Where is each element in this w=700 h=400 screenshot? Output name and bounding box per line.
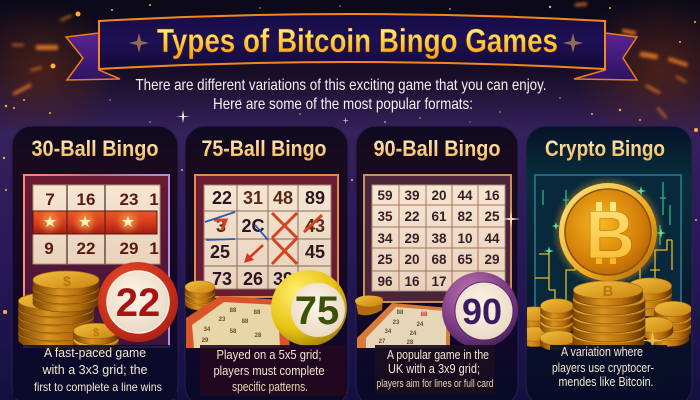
bingo ball: 22 [98, 262, 178, 342]
bingo card: 3x3 grid: 23 [120, 190, 138, 209]
flat bingo card: 27 [379, 339, 386, 345]
flat bingo card: 29 [202, 338, 209, 344]
bingo card: 3x3 grid: 22 [77, 239, 95, 258]
flat bingo card: 28 [407, 340, 414, 346]
flat bingo card [357, 303, 450, 348]
description: players use cryptocer- [552, 360, 654, 375]
description: UK with a 3x9 grid; [388, 361, 480, 376]
flat bingo card: 88 [421, 312, 428, 318]
heading: 75-Ball Bingo: 75-Ball Bingo [202, 136, 326, 161]
intro text [136, 77, 546, 113]
bingo card: number grid: 17 [431, 274, 447, 289]
heading: 30-Ball Bingo: 30-Ball Bingo [32, 136, 158, 161]
caption backdrop [375, 345, 495, 395]
bingo card: 3x3 grid [33, 185, 160, 264]
side coin stacks [516, 278, 692, 351]
heading: Crypto Bingo: Crypto Bingo [545, 136, 665, 161]
bingo card: number grid: 82 [457, 209, 473, 224]
bingo card: 3x3 grid: 7 [45, 190, 55, 209]
bingo card: number grid: 10 [457, 231, 473, 246]
bingo ball: 90: 90 [462, 291, 502, 332]
bingo card: number grid: 22 [404, 209, 420, 224]
bingo ball: 90 [442, 272, 518, 348]
bingo card: number grid: 68 [431, 252, 447, 267]
description [34, 345, 162, 394]
bingo ball: 75: 75 [295, 289, 339, 333]
sparkle [502, 210, 520, 228]
card frame [195, 175, 338, 297]
flat bingo card: 23 [219, 317, 226, 323]
bingo card: 5x5 grid: 3 [216, 216, 226, 236]
bingo card: 3x3 grid: 9 [44, 239, 54, 258]
intro text: Here are some of the most popular formats: [213, 96, 473, 113]
panel: 75-Ball Bingo [185, 126, 348, 400]
caption backdrop [13, 345, 177, 399]
description: with a 3x3 grid; the [42, 362, 148, 377]
bingo card: 5x5 grid: 2C [241, 216, 265, 236]
bingo card: 5x5 grid: 43 [305, 216, 325, 236]
bingo card: 5x5 grid: 31 [243, 188, 263, 208]
description [214, 347, 324, 394]
bingo card: 5x5 grid: 45 [305, 242, 325, 262]
bingo card: 3x3 grid: 1 [149, 239, 159, 258]
bingo card: 5x5 grid [204, 185, 331, 289]
flat bingo card: 24 [417, 322, 424, 328]
description [552, 344, 654, 389]
bingo card: number grid: 25 [484, 209, 500, 224]
panel: Crypto Bingo [516, 126, 692, 400]
flat bingo card: 88 [230, 308, 237, 314]
bingo card: number grid: 29 [484, 252, 500, 267]
panel: 30-Ball Bingo [12, 126, 178, 400]
flat bingo card: 23 [393, 320, 400, 326]
bingo card: number grid: 96 [377, 274, 393, 289]
bingo card: number grid: 44 [457, 188, 473, 203]
banner star: right [563, 33, 583, 53]
description [376, 347, 494, 390]
central coin stack: B [603, 283, 614, 300]
bingo card: number grid: 20 [404, 252, 420, 267]
bingo card: number grid: 34 [377, 231, 393, 246]
flat bingo card: 88 [397, 310, 404, 316]
bingo card: 3x3 grid: 16 [77, 190, 95, 209]
description: players must complete [214, 363, 324, 378]
bingo card: number grid: 39 [404, 188, 420, 203]
bingo card: 5x5 grid: 89 [305, 188, 325, 208]
flat bingo card [186, 296, 290, 348]
bingo card: 5x5 grid: 48 [273, 188, 293, 208]
bingo card: number grid [372, 185, 505, 291]
bingo card: number grid: 29 [404, 231, 420, 246]
panel: 90-Ball Bingo [355, 126, 520, 400]
big bitcoin coin [556, 180, 660, 284]
description: A fast-paced game [44, 345, 146, 360]
card frame [364, 175, 511, 302]
bingo card: number grid: 25 [377, 252, 393, 267]
banner star: left [129, 33, 149, 53]
bingo card: 5x5 grid: 73 [212, 269, 232, 289]
bingo card: 3x3 grid: 29 [120, 239, 138, 258]
description: first to complete a line wins [34, 380, 162, 394]
ribbon tail: left [66, 33, 120, 80]
coin stacks [18, 271, 118, 354]
bingo card: number grid: 61 [431, 209, 447, 224]
small coin stack [185, 281, 215, 310]
bingo card: 5x5 grid: 22 [212, 188, 232, 208]
description: A variation where [561, 344, 643, 359]
bingo card frame [24, 175, 169, 347]
description: specific patterns. [232, 379, 308, 394]
bingo ball: 22: 22 [116, 281, 160, 325]
flat bingo card: 34 [204, 327, 211, 333]
digital backdrop panel [535, 175, 681, 310]
coin stacks: $ [93, 327, 99, 339]
flat bingo card: 34 [385, 329, 392, 335]
bingo card: number grid: 38 [431, 231, 447, 246]
intro text: There are different variations of this exciting game that you can enjoy. [136, 77, 546, 94]
ribbon tail: right [574, 33, 637, 80]
bingo card: number grid: 16 [404, 274, 420, 289]
big bitcoin coin: B [585, 197, 635, 273]
description: players aim for lines or full card [376, 378, 494, 390]
flat bingo card: 88 [254, 310, 261, 316]
flat bingo card: 88 [242, 319, 249, 325]
bingo card: number grid: 65 [457, 252, 473, 267]
caption backdrop [200, 345, 346, 396]
bingo card: number grid: 44 [484, 231, 500, 246]
flat bingo card: 24 [410, 331, 417, 337]
description: Played on a 5x5 grid; [216, 347, 322, 362]
title ribbon banner [66, 14, 637, 80]
bingo card: 5x5 grid: 26 [243, 269, 263, 289]
sparkle [642, 330, 663, 351]
bingo card: number grid: 20 [431, 188, 447, 203]
gold token [355, 296, 383, 315]
description: A popular game in the [387, 347, 489, 362]
title: Types of Bitcoin Bingo Games [157, 22, 558, 59]
bingo ball: 75 [271, 270, 347, 346]
bingo card: 3x3 grid: 1 [149, 190, 159, 209]
flat bingo card: 58 [230, 329, 237, 335]
bingo card: 5x5 grid: 39 [273, 269, 293, 289]
bingo card: number grid: 35 [377, 209, 393, 224]
caption backdrop [550, 345, 667, 391]
central coin stack [573, 281, 645, 351]
bingo card: 5x5 grid: 25 [210, 242, 230, 262]
coin stacks: $ [63, 273, 71, 289]
description: mendes like Bitcoin. [558, 374, 654, 389]
flat bingo card: 28 [255, 333, 262, 339]
heading: 90-Ball Bingo: 90-Ball Bingo [374, 136, 500, 161]
bingo card: number grid: 16 [484, 188, 500, 203]
bingo card: number grid: 59 [377, 188, 393, 203]
ribbon main band [99, 14, 605, 69]
